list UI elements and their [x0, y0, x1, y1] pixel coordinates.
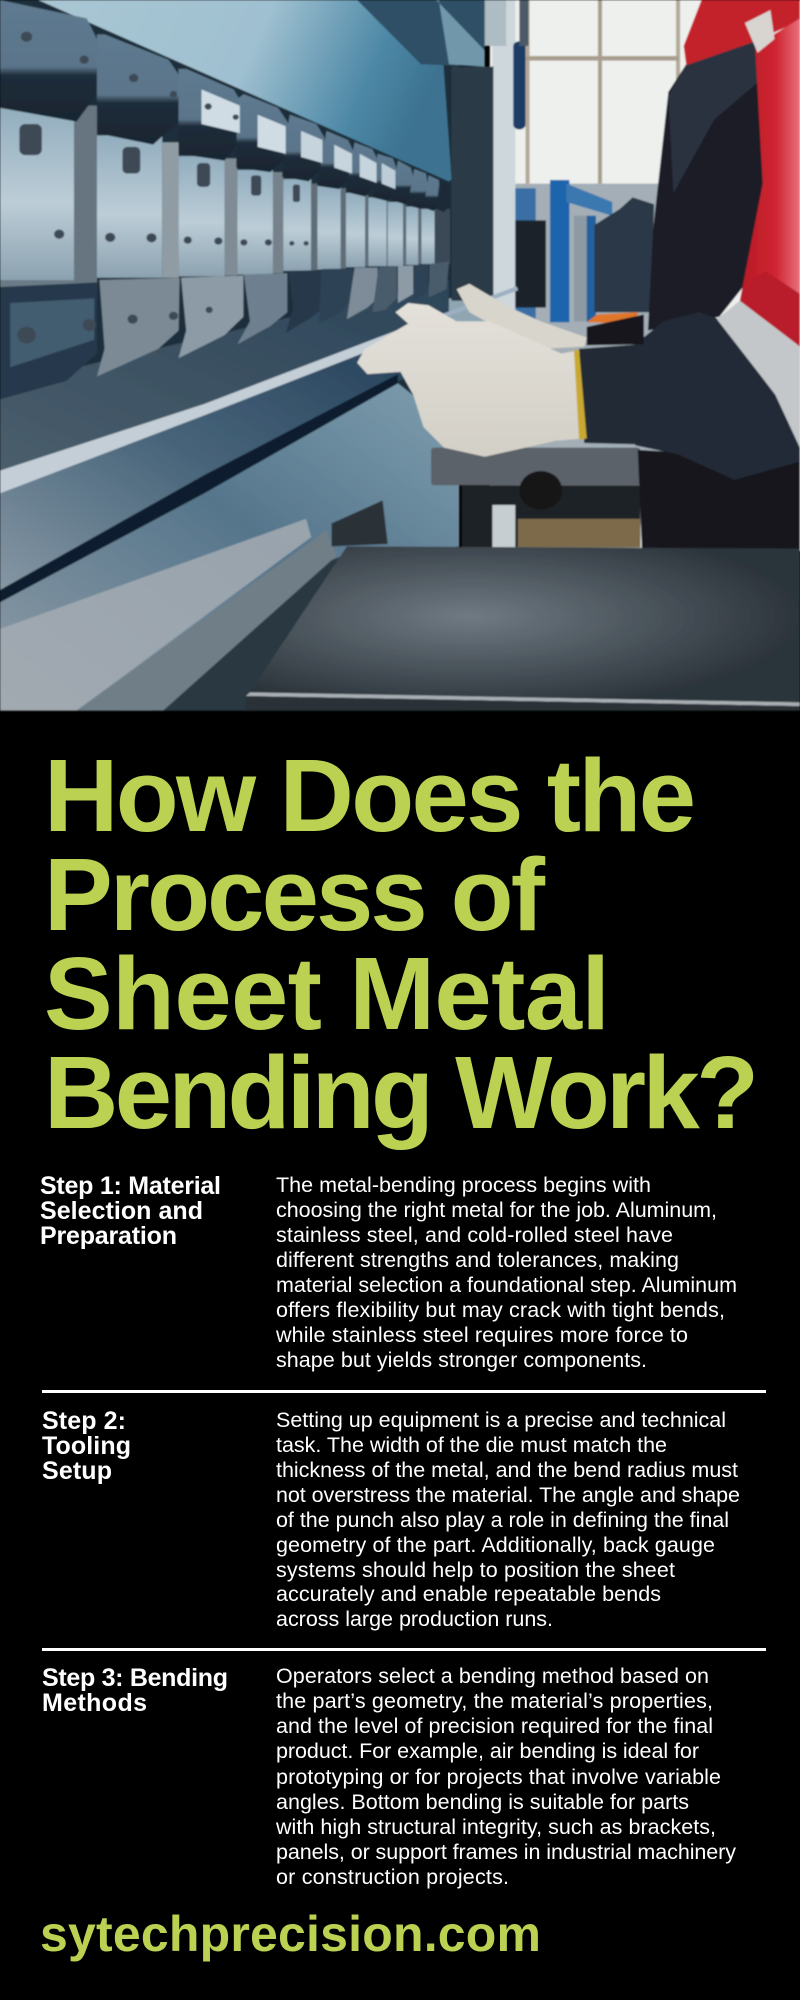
photo: tooling plates [0, 106, 450, 292]
photo: overhead beam [357, 0, 506, 67]
photo: table sheet edge [246, 692, 800, 706]
step 1 heading [40, 1172, 221, 1250]
photo: band below tooling [0, 280, 449, 480]
step 1 body text: material selection a foundational step. Aluminum [276, 1273, 737, 1297]
step 3 heading: Methods [42, 1689, 147, 1717]
step 3 body text: prototyping or for projects that involve variable [276, 1765, 721, 1789]
hero photo: press brake operator [0, 0, 800, 711]
divider 1 [42, 1390, 766, 1393]
step 2 heading: Tooling [42, 1432, 131, 1460]
step 1 body text [275, 1173, 737, 1372]
photo: window background [429, 0, 800, 551]
step 2 panel [42, 1407, 740, 1631]
step 2 heading: Step 2: [42, 1407, 126, 1435]
step 1 body text: choosing the right metal for the job. Aluminum, [276, 1198, 717, 1222]
step 3 heading: Step 3: Bending [42, 1664, 228, 1692]
title: Sheet Metal [44, 936, 610, 1051]
photo: back glove [457, 284, 587, 349]
step 1 body text: offers flexibility but may crack with tight bends, [276, 1298, 725, 1322]
step 2 body text: accurately and enable repeatable bends [276, 1582, 661, 1606]
step 1 heading: Step 1: Material [40, 1172, 221, 1200]
photo: glove cuff edge [574, 350, 587, 440]
photo: worker arm and sleeve [579, 301, 800, 480]
step 1 heading: Preparation [40, 1222, 177, 1250]
step 2 body text: not overstress the material. The angle and shape [276, 1483, 740, 1507]
step 1 body text: while stainless steel requires more force to [275, 1323, 688, 1347]
photo: table sheet [250, 546, 800, 702]
step 2 heading: Setup [42, 1457, 112, 1485]
step 2 body text: Setting up equipment is a precise and technical [276, 1408, 726, 1432]
title: How Does the [44, 738, 696, 853]
photo: rail [77, 530, 337, 711]
step 2 body text: of the punch also play a role in defining the final [276, 1508, 729, 1532]
step 1 heading: Selection and [40, 1197, 203, 1225]
photo: lower machine surfaces [0, 383, 459, 711]
photo: dark lower body [163, 546, 367, 711]
photo: dark groove [0, 374, 398, 602]
photo: table base behind hands [431, 448, 640, 547]
step 2 heading [42, 1407, 131, 1485]
step 2 body text [276, 1408, 740, 1631]
step 3 panel [42, 1664, 736, 1889]
divider 2 [42, 1648, 766, 1651]
photo: upper machine wall [38, 0, 452, 181]
step 3 body text: and the level of precision required for the final [276, 1714, 713, 1738]
title [44, 738, 759, 1150]
photo: light bottom left face [0, 519, 311, 711]
photo: worker torso [638, 0, 800, 549]
step 3 body text: or construction projects. [276, 1865, 509, 1889]
step 3 heading [42, 1664, 228, 1717]
step 1 body text: stainless steel, and cold-rolled steel have [276, 1223, 673, 1247]
step 2 body text: task. The width of the die must match the [276, 1433, 667, 1457]
step 2 body text: geometry of the part. Additionally, back gauge [276, 1533, 715, 1557]
footer website: sytechprecision.com [40, 1906, 541, 1962]
photo: tooling upper blocks [0, 0, 449, 212]
title: Process of [44, 837, 546, 952]
photo: blue frame and distant worker [515, 180, 654, 324]
step 2 body text: thickness of the metal, and the bend radius must [276, 1458, 738, 1482]
photo: bright sheet streak [0, 324, 414, 494]
step 3 body text: product. For example, air bending is ideal for [276, 1739, 699, 1763]
step 2 body text: systems should help to position the sheet [276, 1558, 675, 1582]
step 3 body text: angles. Bottom bending is suitable for parts [276, 1790, 689, 1814]
step 3 body text: with high structural integrity, such as brackets, [275, 1815, 716, 1839]
step 3 body text: panels, or support frames in industrial machinery [276, 1840, 736, 1864]
photo: sheet underside [0, 337, 408, 592]
photo: front glove [357, 303, 584, 457]
step 1 panel [40, 1172, 737, 1372]
step 3 body text: the part’s geometry, the material’s properties, [276, 1689, 713, 1713]
photo: tooling lower blocks [0, 262, 449, 399]
step 1 body text: shape but yields stronger components. [276, 1348, 647, 1372]
photo: bracket [332, 500, 388, 546]
step 2 body text: across large production runs. [276, 1607, 553, 1631]
photo: rivets [17, 32, 309, 343]
step 3 body text [275, 1664, 736, 1889]
step 1 body text: different strengths and tolerances, making [276, 1248, 679, 1272]
photo: machine base fill [0, 0, 459, 711]
photo: shadow below sheet [245, 696, 800, 711]
step 1 body text: The metal-bending process begins with [276, 1173, 651, 1197]
photo: dark column [452, 67, 493, 301]
photo: handle [513, 0, 529, 129]
photo: sheet edge held by hands [413, 288, 517, 327]
step 3 body text: Operators select a bending method based on [276, 1664, 709, 1688]
title: Bending Work? [44, 1035, 759, 1150]
